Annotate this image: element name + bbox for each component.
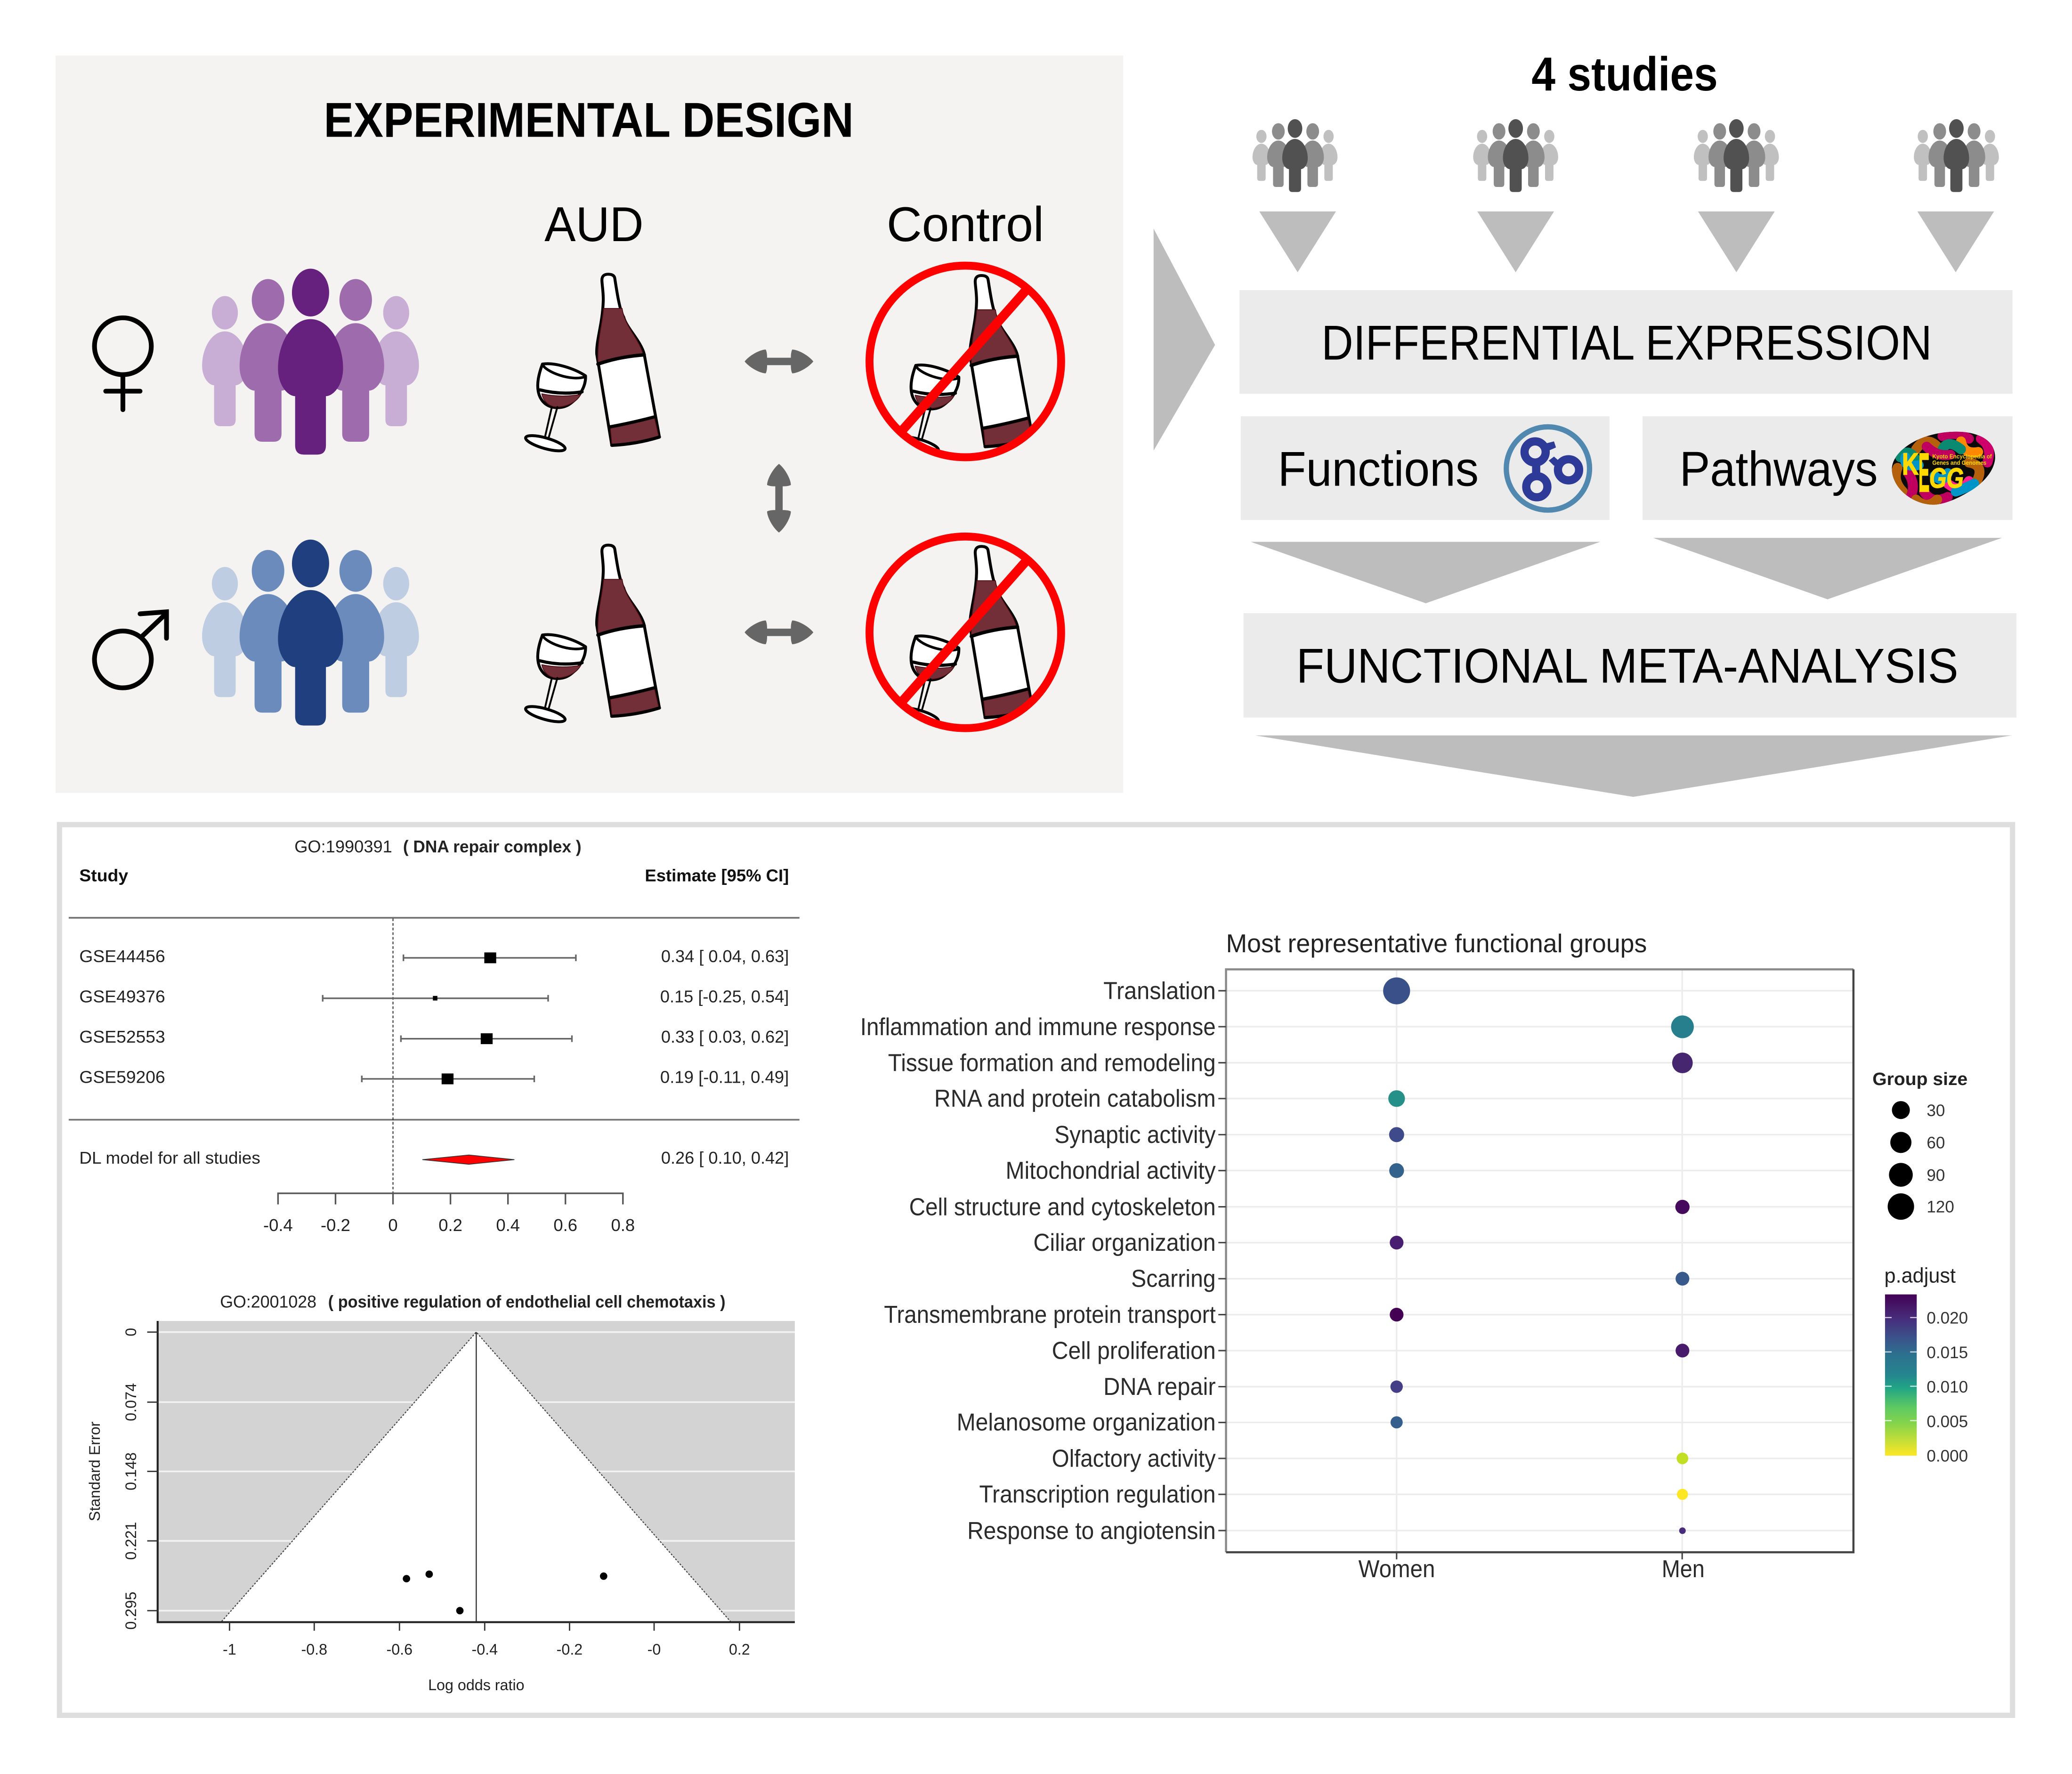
funnel x labels — [223, 1641, 750, 1693]
funnel y labels: 0.295 — [122, 1592, 139, 1630]
icon: wine, male AUD — [524, 545, 659, 725]
column label: AUD: AUD — [544, 197, 644, 252]
dot plot row labels: Olfactory activity — [1052, 1445, 1216, 1472]
icon: male symbol — [95, 612, 167, 688]
legend: p.adjust colour bar — [1885, 1263, 1968, 1466]
legend: group size: 30 — [1926, 1102, 1945, 1120]
forest plot title — [294, 837, 582, 856]
forest x axis: -0.2 — [321, 1215, 350, 1235]
icon: KEGG logo: Genes and Genomes — [1932, 459, 1986, 466]
funnel y labels: Standard Error — [86, 1421, 103, 1521]
funnel x labels: -1 — [223, 1641, 236, 1658]
icon: KEGG logo — [1892, 431, 1995, 505]
panel: differential expression: DIFFERENTIAL EXPRESSION — [1321, 316, 1932, 370]
dot plot row labels — [860, 977, 1216, 1545]
forest x axis — [263, 1193, 635, 1235]
forest plot column headers: Estimate [95% CI] — [645, 866, 789, 885]
arrow: female vs male — [767, 464, 791, 533]
legend: p.adjust colour bar: 0.010 — [1926, 1378, 1968, 1396]
dot plot row labels: Mitochondrial activity — [1005, 1157, 1216, 1184]
forest plot title: ( DNA repair complex ) — [403, 837, 582, 856]
icon: male group — [202, 540, 419, 726]
forest plot title: GO:1990391 — [294, 837, 392, 856]
legend: group size: 120 — [1926, 1198, 1954, 1216]
icon: study 2 cohort — [1473, 119, 1558, 192]
dot plot title: Most representative functional groups — [1226, 929, 1647, 958]
forest row: GSE44456: 0.34 [ 0.04, 0.63] — [661, 947, 789, 966]
legend: group size: Group size — [1872, 1069, 1967, 1089]
arrow: design to studies — [1154, 228, 1215, 451]
forest row: GSE44456 — [79, 947, 789, 966]
funnel axes — [147, 1321, 795, 1631]
dot plot row labels: DNA repair — [1103, 1373, 1216, 1401]
funnel triangle — [222, 1332, 730, 1621]
icon: study 3 cohort — [1694, 119, 1779, 192]
forest row: GSE49376: GSE49376 — [79, 987, 165, 1006]
icon: no wine, male control — [869, 536, 1061, 728]
dot plot frame and grid — [1218, 969, 1853, 1559]
dot plot row labels: Cell proliferation — [1052, 1337, 1216, 1364]
funnel x labels: -0.8 — [301, 1641, 327, 1658]
forest row: GSE59206: GSE59206 — [79, 1068, 165, 1087]
funnel x labels: 0.2 — [729, 1641, 750, 1658]
forest row: GSE59206 — [79, 1068, 789, 1087]
arrow: female AUD vs control — [745, 349, 813, 373]
panel: functions — [1241, 416, 1610, 520]
forest plot column headers — [79, 866, 789, 885]
arrow: male AUD vs control — [745, 620, 813, 644]
arrow: pathways down — [1653, 538, 2002, 599]
arrow: study 3 down — [1698, 211, 1775, 272]
dot plot x labels: Men — [1662, 1555, 1705, 1583]
panel: results — [59, 825, 2013, 1715]
dot plot row labels: Tissue formation and remodeling — [888, 1049, 1216, 1077]
dot plot row labels: Translation — [1103, 977, 1216, 1004]
legend: p.adjust colour bar: 0.000 — [1926, 1447, 1968, 1466]
panel: pathways: Pathways — [1680, 442, 1878, 496]
dot plot row labels: Synaptic activity — [1054, 1121, 1216, 1149]
column label: Control: Control — [887, 197, 1044, 252]
forest row: GSE52553 — [79, 1027, 789, 1046]
forest x axis: 0.2 — [438, 1215, 462, 1235]
icon: KEGG logo: GG — [1929, 463, 1964, 494]
funnel x labels: -0.6 — [386, 1641, 413, 1658]
legend: p.adjust colour bar: 0.015 — [1926, 1344, 1968, 1362]
funnel study points — [403, 1571, 607, 1614]
dot plot row labels: Ciliar organization — [1033, 1229, 1216, 1256]
funnel x labels: -0.4 — [471, 1641, 498, 1658]
icon: study 1 cohort — [1253, 119, 1337, 192]
heading: experimental design: EXPERIMENTAL DESIGN — [324, 93, 854, 147]
icon: female symbol — [95, 318, 151, 410]
panel: pathways — [1643, 416, 2013, 520]
arrow: study 1 down — [1259, 211, 1336, 272]
icon: female group — [202, 268, 419, 454]
forest plot — [69, 837, 800, 1235]
funnel x labels: -0 — [648, 1641, 661, 1658]
forest row: GSE52553: GSE52553 — [79, 1027, 165, 1046]
heading: 4 studies: 4 studies — [1531, 48, 1718, 101]
icon: KEGG logo: Kyoto Encyclopedia of — [1932, 453, 1992, 460]
forest x axis: 0 — [388, 1215, 398, 1235]
funnel y labels: 0 — [122, 1328, 139, 1337]
funnel x labels: -0.2 — [557, 1641, 583, 1658]
funnel x labels: Log odds ratio — [428, 1677, 525, 1693]
funnel plot — [86, 1292, 795, 1693]
icon: no wine, female control — [869, 266, 1061, 457]
funnel y labels: 0.074 — [122, 1383, 139, 1421]
forest x axis: 0.8 — [611, 1215, 635, 1235]
arrow: study 2 down — [1477, 211, 1554, 272]
legend: p.adjust colour bar: 0.005 — [1926, 1413, 1968, 1431]
dot plot row labels: Scarring — [1131, 1265, 1216, 1293]
panel: functions: Functions — [1278, 442, 1479, 496]
forest row: GSE52553: 0.33 [ 0.03, 0.62] — [661, 1027, 789, 1046]
forest row: GSE49376 — [79, 987, 789, 1006]
icon: KEGG logo: E — [1918, 441, 1930, 503]
dot plot x labels: Women — [1359, 1555, 1435, 1583]
forest x axis: 0.6 — [553, 1215, 577, 1235]
legend: group size — [1872, 1069, 1967, 1220]
funnel plot background — [158, 1321, 795, 1622]
icon: study 4 cohort — [1914, 119, 1999, 192]
forest row: GSE59206: 0.19 [-0.11, 0.49] — [660, 1068, 789, 1087]
icon: wine, female AUD — [524, 274, 659, 454]
legend: p.adjust colour bar: p.adjust — [1885, 1263, 1956, 1287]
dot plot row labels: Inflammation and immune response — [860, 1013, 1216, 1041]
funnel y labels: 0.221 — [122, 1522, 139, 1560]
funnel plot title: GO:2001028 — [220, 1292, 316, 1312]
dot plot — [860, 929, 1968, 1583]
arrow: study 4 down — [1918, 211, 1994, 272]
forest x axis: -0.4 — [263, 1215, 293, 1235]
dot plot row labels: Melanosome organization — [957, 1409, 1216, 1436]
funnel y labels: 0.148 — [122, 1452, 139, 1490]
dot plot row labels: Response to angiotensin — [967, 1517, 1216, 1545]
dot plot row labels: Transmembrane protein transport — [884, 1301, 1216, 1328]
dot plot row labels: RNA and protein catabolism — [934, 1085, 1216, 1112]
icon: KEGG logo: K — [1902, 447, 1918, 481]
legend: group size: 60 — [1926, 1134, 1945, 1152]
legend: p.adjust colour bar: 0.020 — [1926, 1309, 1968, 1327]
panel: experimental design — [56, 56, 1123, 793]
arrow: functions down — [1251, 542, 1600, 603]
dot plot points — [1383, 977, 1694, 1534]
funnel y labels — [86, 1328, 139, 1630]
dot plot x labels — [1359, 1555, 1705, 1583]
panel: functional meta-analysis — [1244, 613, 2016, 718]
dot plot row labels: Transcription regulation — [979, 1481, 1216, 1508]
dot plot row labels: Cell structure and cytoskeleton — [909, 1193, 1216, 1221]
forest plot column headers: Study — [79, 866, 129, 885]
forest x axis: 0.4 — [496, 1215, 520, 1235]
forest summary row: DL model: 0.26 [ 0.10, 0.42] — [661, 1148, 789, 1167]
funnel plot title: ( positive regulation of endothelial cell chemotaxis ) — [328, 1292, 726, 1312]
forest summary row: DL model — [79, 1148, 789, 1167]
legend: group size: 90 — [1926, 1166, 1945, 1184]
forest summary row: DL model: DL model for all studies — [79, 1148, 260, 1167]
panel: differential expression — [1239, 290, 2013, 394]
icon: gene ontology logo — [1506, 427, 1589, 510]
forest row: GSE49376: 0.15 [-0.25, 0.54] — [660, 987, 789, 1006]
forest row: GSE44456: GSE44456 — [79, 947, 165, 966]
arrow: meta-analysis to results — [1255, 736, 2012, 797]
panel: functional meta-analysis: FUNCTIONAL META-ANALYSIS — [1296, 639, 1959, 693]
